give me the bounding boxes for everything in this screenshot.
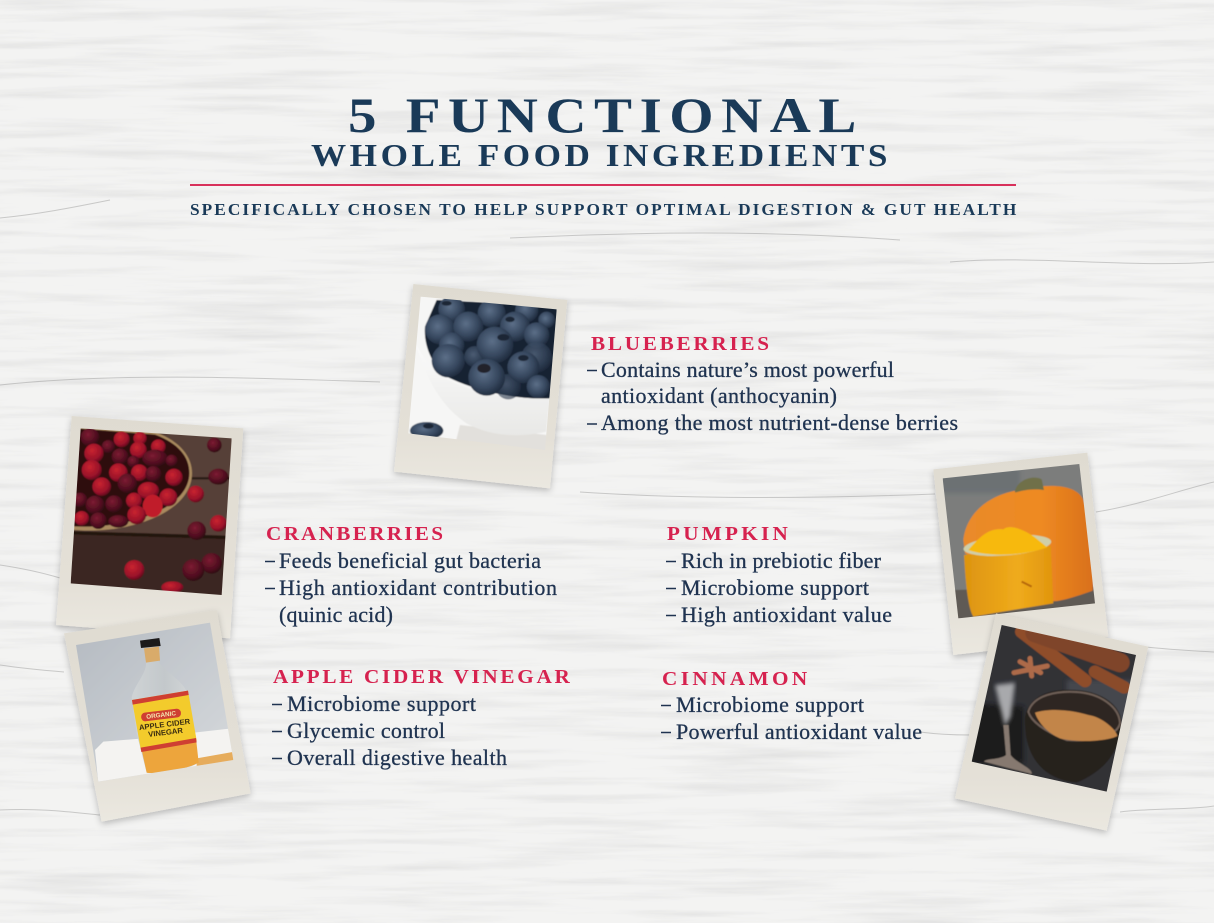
photo: cinnamon [955, 613, 1148, 831]
bottle label text: VINEGAR [148, 726, 184, 739]
text block: blueberries: Among the most nutrient-dense berries [601, 410, 958, 435]
text block: cinnamon: Microbiome support [676, 692, 864, 717]
photo: apple cider vinegar [64, 610, 251, 822]
text block: cinnamon [661, 669, 922, 744]
text block: cranberries: High antioxidant contribution [279, 575, 557, 600]
photo: pumpkin [933, 453, 1108, 655]
text block: cranberries: CRANBERRIES [266, 524, 443, 545]
text block: apple cider vinegar: Overall digestive health [287, 745, 507, 770]
text block: apple cider vinegar: APPLE CIDER VINEGAR [273, 667, 571, 688]
text block: blueberries [587, 334, 958, 435]
title line 1: 5 FUNCTIONAL [348, 87, 856, 143]
text block: apple cider vinegar: Microbiome support [287, 691, 476, 716]
title line 2: WHOLE FOOD INGREDIENTS [311, 138, 887, 174]
subtitle: SPECIFICALLY CHOSEN TO HELP SUPPORT OPTIMAL DIGESTION & GUT HEALTH [190, 200, 1016, 219]
text block: blueberries: BLUEBERRIES [591, 334, 769, 355]
text block: apple cider vinegar [272, 667, 571, 770]
title [311, 87, 887, 174]
text block: apple cider vinegar: Glycemic control [287, 718, 445, 743]
text block: pumpkin: High antioxidant value [681, 602, 892, 627]
text block: cranberries: (quinic acid) [279, 602, 393, 627]
bottle label text: APPLE CIDER [138, 717, 191, 732]
text block: cinnamon: CINNAMON [662, 669, 807, 690]
photo: cranberries [56, 416, 243, 638]
text block: cinnamon: Powerful antioxidant value [676, 719, 922, 744]
text block: pumpkin: Rich in prebiotic fiber [681, 548, 882, 573]
text block: blueberries: Contains nature’s most powerful [601, 357, 894, 382]
text block: pumpkin: Microbiome support [681, 575, 869, 600]
bottle label text: ORGANIC [146, 710, 177, 721]
text block: cranberries [265, 524, 557, 627]
text block: cranberries: Feeds beneficial gut bacteria [279, 548, 541, 573]
photo: blueberries [394, 284, 567, 488]
text block: pumpkin: PUMPKIN [667, 524, 788, 545]
text block: blueberries: antioxidant (anthocyanin) [601, 383, 837, 408]
text block: pumpkin [666, 524, 892, 627]
bottle label text [140, 711, 190, 737]
